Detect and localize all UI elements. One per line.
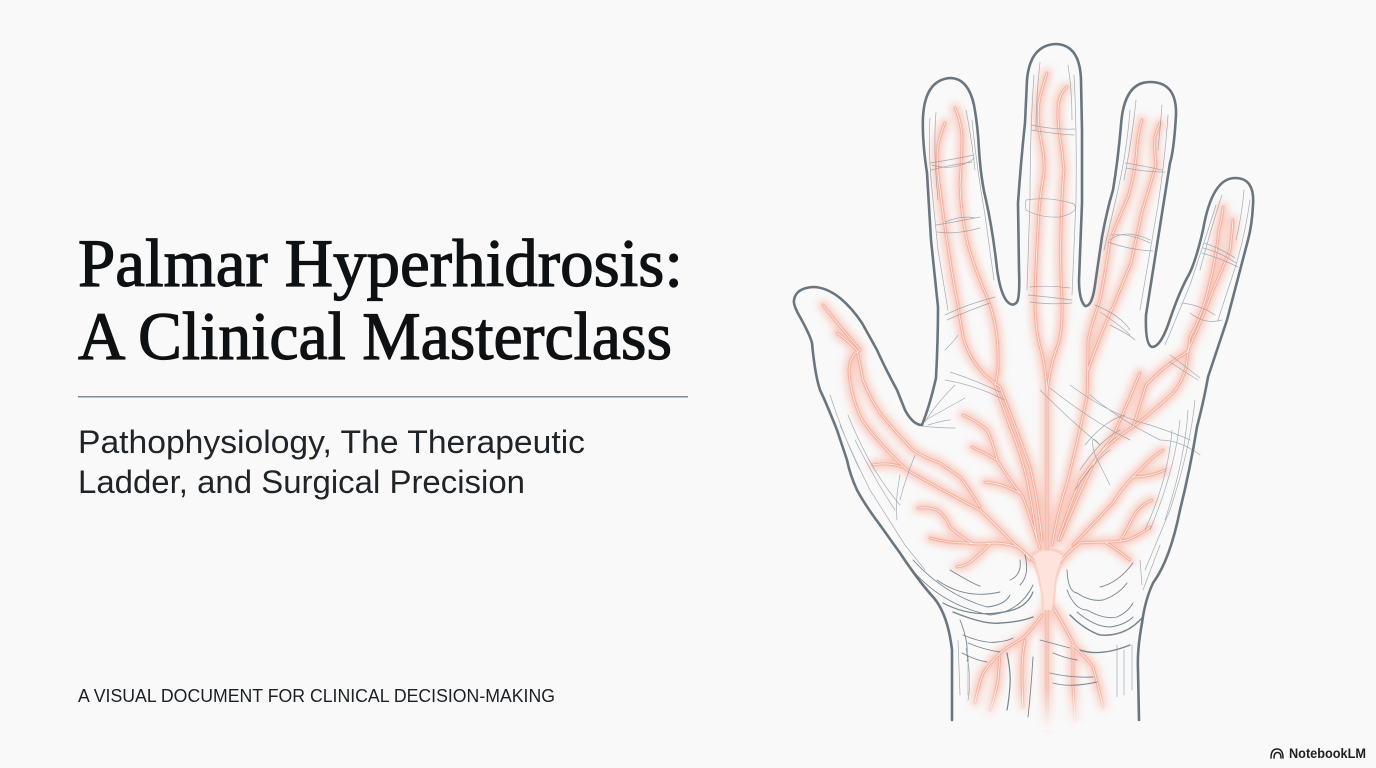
subtitle	[78, 424, 585, 500]
wrist fade	[960, 688, 1130, 730]
hand illustration	[794, 44, 1253, 730]
title: A Clinical Masterclass	[78, 298, 672, 374]
title: Palmar Hyperhidrosis:	[78, 225, 683, 301]
footer caption: A VISUAL DOCUMENT FOR CLINICAL DECISION-MAKING	[78, 686, 555, 706]
skin crease lines	[830, 62, 1250, 700]
hand outline	[794, 44, 1253, 720]
subtitle: Ladder, and Surgical Precision	[78, 464, 525, 500]
palm base and wrist lines	[908, 555, 1142, 717]
nerve network	[823, 73, 1233, 723]
title	[78, 225, 683, 374]
subtitle: Pathophysiology, The Therapeutic	[78, 424, 585, 460]
nerve hub	[1028, 547, 1068, 612]
NotebookLM badge: NotebookLM	[1289, 746, 1366, 761]
icon: NotebookLM logo	[1271, 749, 1283, 758]
